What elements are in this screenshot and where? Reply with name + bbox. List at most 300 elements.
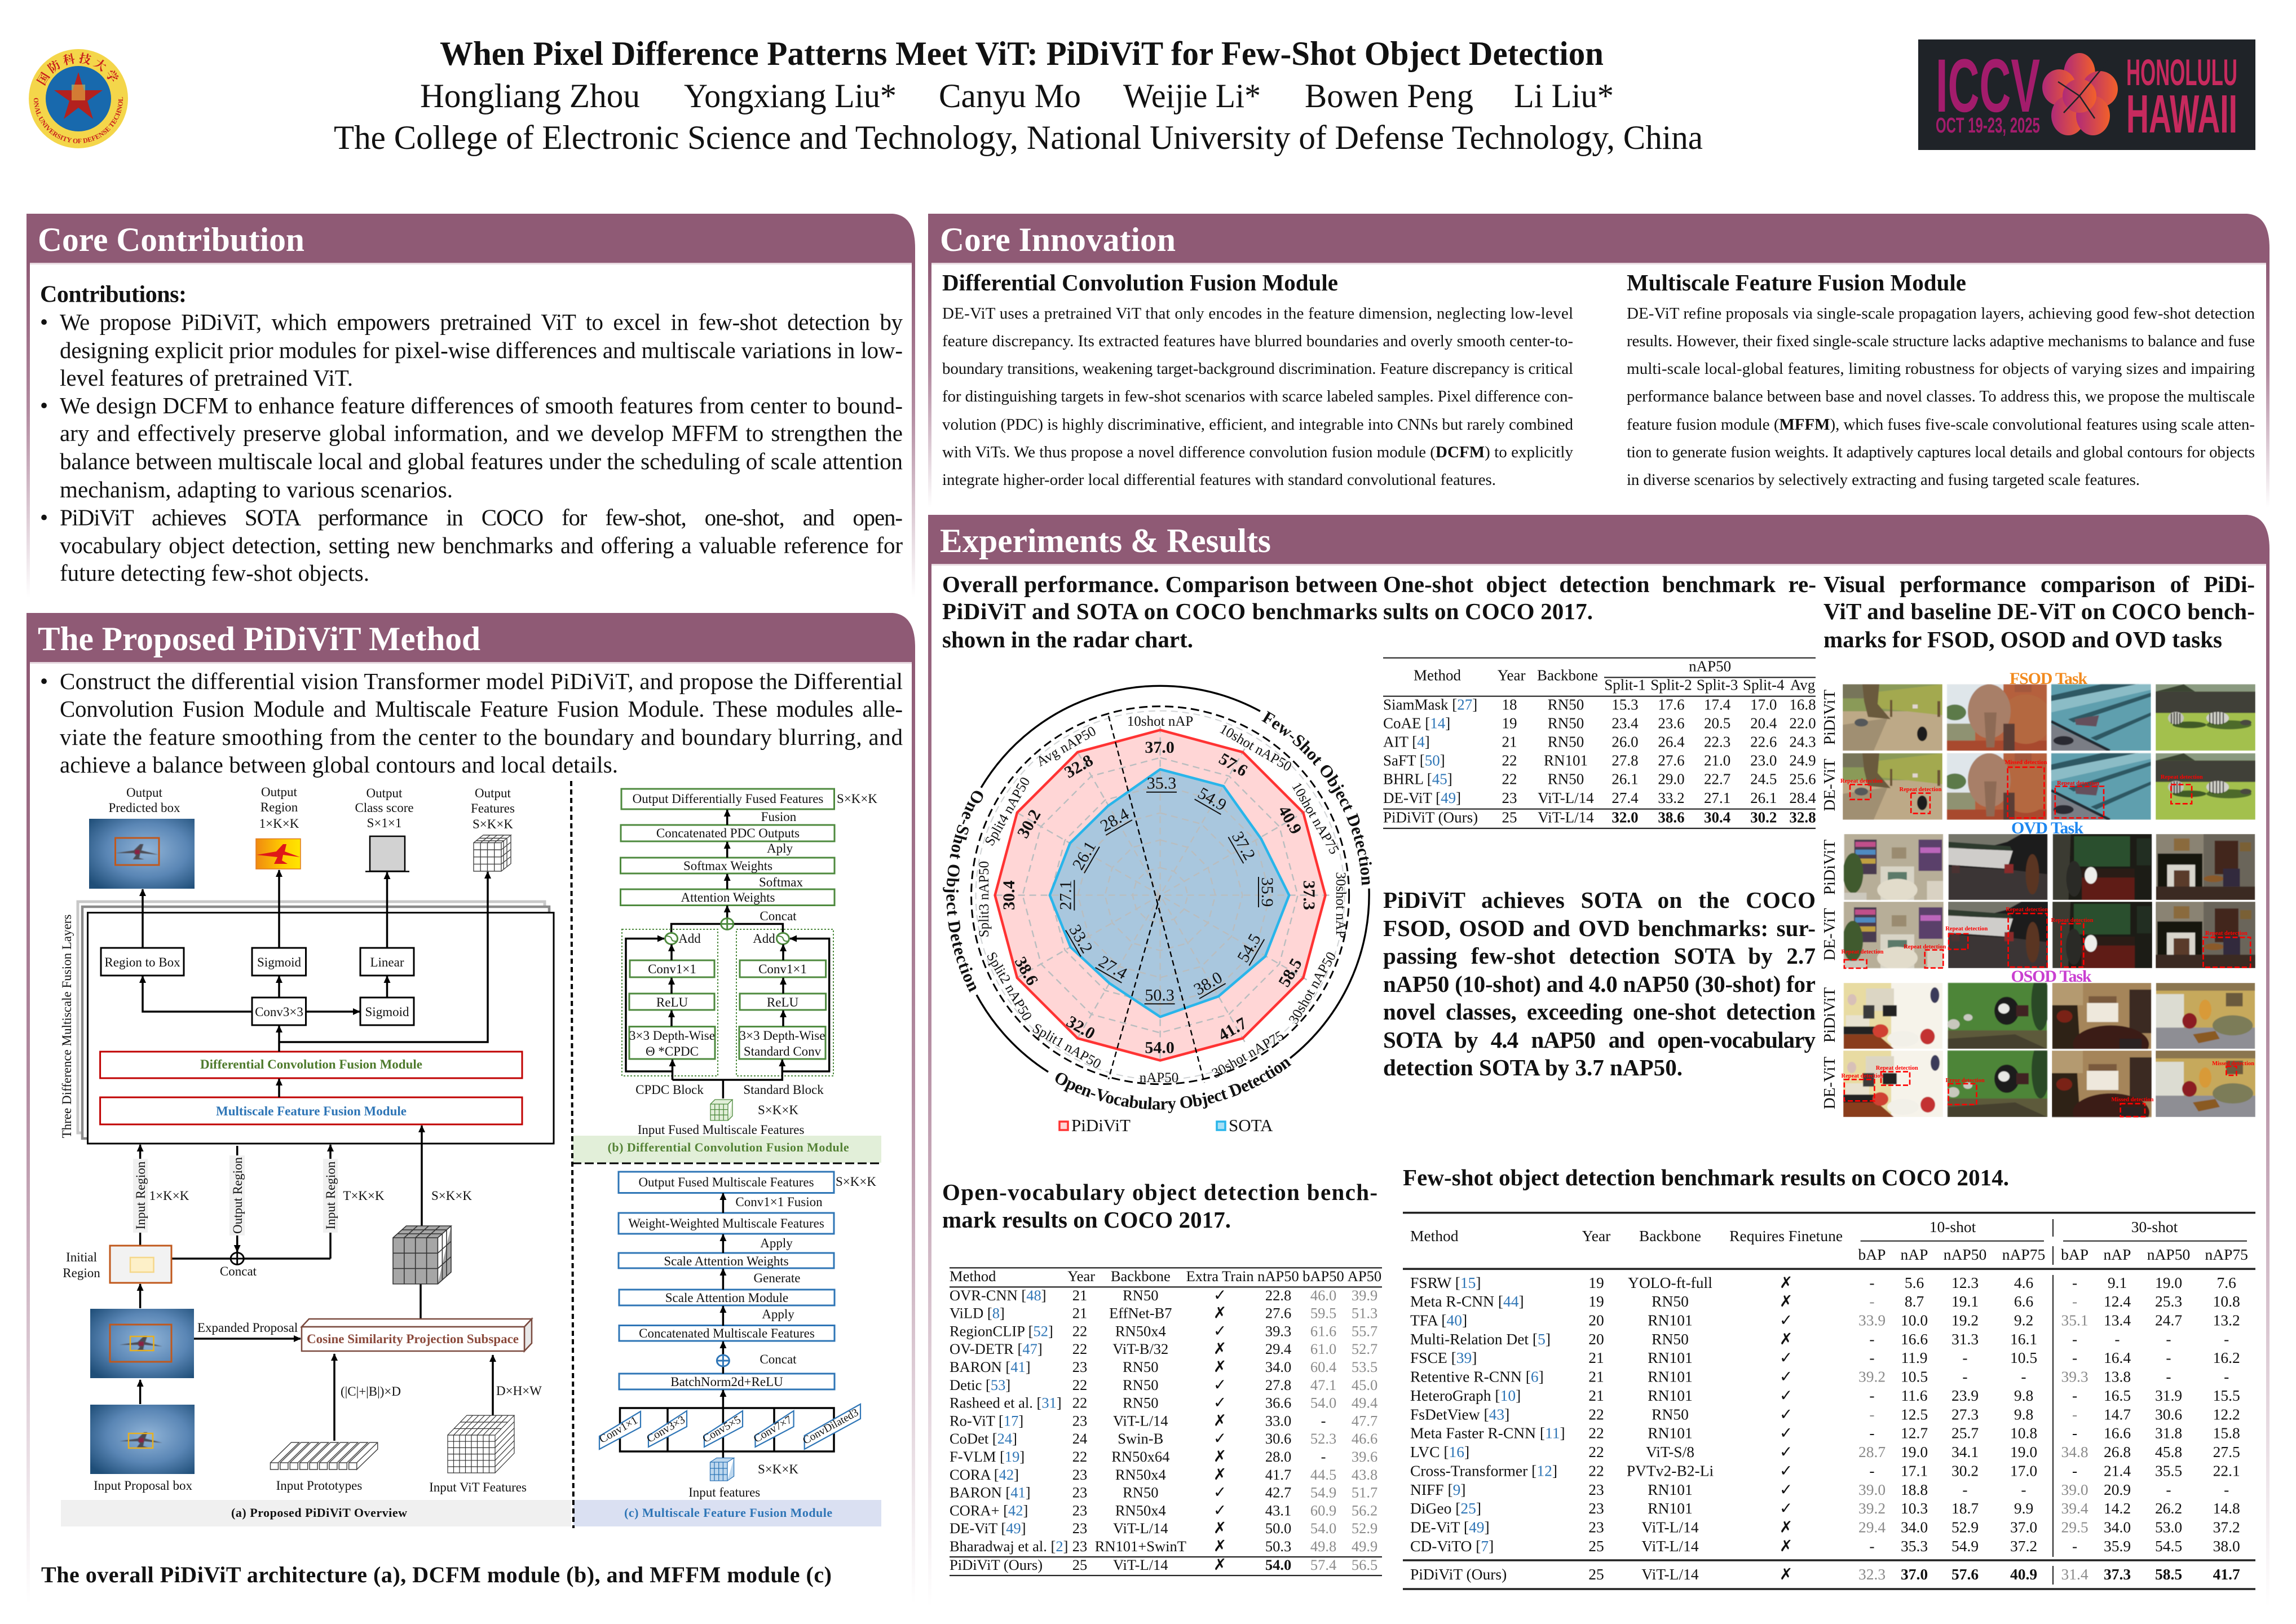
table rows: ✗ — [1213, 1537, 1226, 1555]
table rows: 50.0 — [1265, 1520, 1291, 1537]
table rows: 11.6 — [1901, 1387, 1928, 1404]
table rows: CoDet [24] — [950, 1430, 1017, 1447]
standard block: 3×3 Depth-Wise — [740, 1029, 825, 1043]
dimension labels: Input Prototypes — [276, 1479, 362, 1493]
inner blocks: Linear — [370, 955, 404, 969]
text: one-shot heading: sults on COCO 2017. — [1383, 598, 1593, 624]
table rows: RN101 — [1648, 1499, 1693, 1517]
standard block: Conv1×1 — [758, 962, 807, 976]
table header: nAP50 — [1944, 1246, 1986, 1263]
table rows: 51.7 — [1352, 1484, 1377, 1501]
legend: PiDiViT — [1071, 1115, 1131, 1135]
text block: contributions: designing explicit prior modules for pixel-wise differences and multiscale variations in low- — [60, 337, 903, 363]
table row: ours: ViT-L/14 — [1538, 809, 1594, 826]
table rows: 23 — [1588, 1518, 1604, 1536]
table rows: RN50x4 — [1115, 1502, 1166, 1519]
table rows: 19.0 — [2155, 1274, 2182, 1291]
text block: multiscale feature fusion module — [1627, 270, 2255, 489]
table rows: 24.7 — [2155, 1312, 2182, 1329]
table row: ours: 37.0 — [1901, 1565, 1928, 1583]
table rows: 24.3 — [1789, 733, 1816, 750]
PiDiViT values: 30.4 — [1000, 880, 1018, 910]
table rows: RN50x4 — [1115, 1322, 1166, 1339]
stacked output boxes: Output Differentially Fused Features — [633, 792, 823, 806]
PiDiViT values: 32.8 — [1061, 751, 1096, 782]
panel: the proposed PiDiViT method — [27, 613, 915, 1604]
table rows: - — [1869, 1537, 1875, 1555]
stacked output boxes: Fusion — [761, 810, 797, 824]
table rows: 31.3 — [1951, 1330, 1979, 1348]
table header: bAP50 — [1302, 1268, 1344, 1285]
stacked blocks: S×K×K — [836, 1175, 876, 1189]
dimension labels: Input ViT Features — [429, 1480, 527, 1494]
axis labels — [977, 714, 1348, 1085]
stacked blocks: Generate — [753, 1271, 801, 1285]
table rows: 17.6 — [1658, 696, 1685, 713]
table rows: 42.7 — [1265, 1484, 1291, 1501]
standard block: Standard Conv — [744, 1044, 822, 1058]
table rows: 45.8 — [2155, 1443, 2182, 1460]
output images and labels: 1×K×K — [259, 817, 299, 831]
heading: few-shot results: Few-shot object detection benchmark results on COCO 2014. — [1403, 1164, 2009, 1190]
table header: Year — [1582, 1227, 1610, 1245]
stacked blocks: Output Fused Multiscale Features — [638, 1175, 814, 1189]
table row: ours: 40.9 — [2010, 1565, 2037, 1583]
table rows: - — [1321, 1448, 1326, 1465]
table rows: 49.9 — [1352, 1538, 1377, 1555]
table rows: 19 — [1588, 1292, 1604, 1310]
FSOD images: Repeat detection — [2161, 774, 2203, 780]
table rows: 27.5 — [2213, 1443, 2240, 1460]
text block: multiscale feature fusion module: tion to generate fusion weights. It adaptively captures local details and global contours for objects — [1627, 443, 2255, 461]
input fused multiscale features: Input Fused Multiscale Features — [638, 1123, 805, 1137]
CPDC block: 3×3 Depth-Wise — [629, 1029, 715, 1043]
table rows: 19 — [1588, 1274, 1604, 1291]
SOTA values: 28.4 — [1097, 805, 1132, 836]
PiDiViT values — [1000, 738, 1318, 1057]
table rows: 21.4 — [2104, 1462, 2131, 1479]
table rows: RN50 — [1123, 1484, 1158, 1501]
table rows: 22 — [1072, 1340, 1087, 1357]
table rows: BHRL [45] — [1383, 771, 1452, 788]
text block: contributions: future detecting few-shot objects. — [60, 560, 369, 586]
table rows: - — [2166, 1349, 2171, 1366]
table rows: RN101 — [1648, 1312, 1693, 1329]
standard block — [736, 929, 833, 1097]
table header: nAP — [1901, 1246, 1928, 1263]
text block: method intro: • — [40, 668, 48, 694]
table rows: 24.9 — [1789, 752, 1816, 769]
table rows: 56.2 — [1352, 1502, 1377, 1519]
table rows: ✓ — [1780, 1442, 1792, 1461]
text: overall performance: Overall performance. Comparison between — [942, 571, 1377, 597]
table rows: 16.1 — [2010, 1330, 2037, 1348]
stacked output boxes — [620, 789, 877, 923]
axis labels: nAP50 — [1140, 1070, 1178, 1085]
group titles: One-Shot Object Detection — [943, 791, 983, 992]
row labels — [1821, 690, 1839, 1109]
table rows: 35.5 — [2155, 1462, 2182, 1479]
stacked blocks: Concatenated Multiscale Features — [639, 1326, 815, 1340]
table row: ours: 54.0 — [1265, 1556, 1291, 1573]
table header: Split-1 — [1604, 676, 1646, 693]
table rows: 34.0 — [1265, 1358, 1291, 1375]
SOTA values: 50.3 — [1145, 986, 1175, 1004]
table rows: 52.9 — [1352, 1520, 1377, 1537]
table rows: ✗ — [1213, 1465, 1226, 1484]
table rows: 35.9 — [2104, 1537, 2131, 1555]
table header: nAP50 — [1689, 658, 1731, 675]
table rows: BARON [41] — [950, 1484, 1031, 1501]
table rows: RegionCLIP [52] — [950, 1322, 1053, 1339]
table rows: 19 — [1502, 715, 1517, 732]
table rows: 23.4 — [1611, 715, 1639, 732]
table rows: RN101 — [1648, 1481, 1693, 1498]
table rows: DE-ViT [49] — [1410, 1518, 1490, 1536]
table rows: 39.2 — [1858, 1368, 1886, 1385]
output images and labels: Features — [471, 801, 515, 815]
table rows: 20.5 — [1704, 715, 1730, 732]
table rows: 16.6 — [2104, 1424, 2131, 1442]
table rows: 21 — [1588, 1349, 1604, 1366]
table rows: 10.8 — [2010, 1424, 2037, 1442]
table header: nAP75 — [2002, 1246, 2045, 1263]
table row: ours: ✗ — [1213, 1555, 1226, 1574]
table rows: 29.5 — [2061, 1518, 2089, 1536]
table rows: ✗ — [1780, 1537, 1792, 1555]
text block: contributions: vocabulary object detection, setting new benchmarks and offering a valuable reference for — [60, 532, 903, 558]
table header: nAP75 — [2205, 1246, 2248, 1263]
bands: figure captions: (b) Differential Convolution Fusion Module — [608, 1140, 849, 1154]
text block: multiscale feature fusion module: performance balance between base and novel classes. To address this, we propose the multiscale — [1627, 387, 2255, 405]
input fused multiscale features: S×K×K — [758, 1103, 798, 1117]
logo: ICCV 2025 Honolulu Hawaii: OCT 19-23, 2025 — [1936, 114, 2040, 138]
authors: Yongxiang Liu* — [684, 77, 897, 114]
text block: contributions — [40, 282, 903, 586]
table rows: 17.0 — [2010, 1462, 2037, 1479]
icon: input ViT features — [448, 1415, 514, 1473]
table rows: - — [1869, 1330, 1875, 1348]
FSOD images: Repeat detection — [1900, 787, 1942, 793]
text block: contributions: We design DCFM to enhance feature differences of smooth features from center to bound- — [60, 392, 903, 418]
table rows: ✓ — [1213, 1483, 1226, 1502]
table rows: 22 — [1072, 1448, 1087, 1465]
table row: ours: ✗ — [1780, 1565, 1792, 1583]
CPDC block: Add — [678, 932, 701, 946]
axis labels: Split1 nAP50 — [1030, 1021, 1103, 1072]
conv branches: Conv7×7 — [752, 1414, 794, 1445]
table header — [1403, 1213, 2255, 1269]
table rows: - — [2021, 1368, 2026, 1385]
table rows: RN50 — [1123, 1287, 1158, 1304]
table rows: 28.7 — [1858, 1443, 1886, 1460]
table rows: 30.6 — [2155, 1405, 2182, 1423]
table rows: 31.8 — [2155, 1424, 2182, 1442]
axis labels: 10shot nAP — [1127, 714, 1193, 729]
text: visual performance heading: marks for FSOD, OSOD and OVD tasks — [1823, 626, 2222, 652]
PiDiViT values: 30.2 — [1014, 806, 1045, 841]
table header: Backbone — [1537, 667, 1598, 684]
table rows: - — [2072, 1462, 2077, 1479]
table rows: 22 — [1502, 771, 1517, 788]
table rows: 22.3 — [1704, 733, 1730, 750]
table rows: 25.6 — [1789, 771, 1816, 788]
PiDiViT values: 57.6 — [1216, 749, 1251, 780]
table header: nAP50 — [2147, 1246, 2190, 1263]
table rows: ✓ — [1780, 1348, 1792, 1367]
output images and labels: Output — [126, 785, 163, 800]
table row: ours: 32.3 — [1858, 1565, 1886, 1583]
table rows: 60.9 — [1310, 1502, 1336, 1519]
table rows: 52.9 — [1951, 1518, 1979, 1536]
table rows: 12.3 — [1951, 1274, 1979, 1291]
table row: ours: ViT-L/14 — [1113, 1556, 1168, 1573]
PiDiViT values: 58.5 — [1275, 955, 1306, 990]
table rows: 16.4 — [2104, 1349, 2131, 1366]
table rows: 16.8 — [1789, 696, 1816, 713]
heading: experiments and results: Experiments & Results — [940, 522, 1271, 559]
table rows: RN50 — [1123, 1376, 1158, 1393]
table rows: 22.6 — [1750, 733, 1777, 750]
text: results summary: PiDiViT achieves SOTA on the COCO — [1383, 887, 1816, 913]
text block: differential convolution fusion module — [942, 270, 1573, 489]
PiDiViT values: 32.0 — [1063, 1012, 1098, 1043]
table rows: 61.0 — [1310, 1340, 1336, 1357]
table rows: ✗ — [1213, 1357, 1226, 1376]
table rows: ✓ — [1780, 1480, 1792, 1499]
table rows: 22 — [1502, 752, 1517, 769]
stacked output boxes: Concat — [760, 909, 797, 923]
table rows — [1383, 696, 1816, 806]
SOTA values: 35.9 — [1258, 877, 1277, 907]
FSOD images: Missed detection — [2005, 760, 2047, 766]
table row: ours: 41.7 — [2213, 1565, 2240, 1583]
table header: bAP — [1858, 1246, 1886, 1263]
text block: contributions: PiDiViT achieves SOTA performance in COCO for few-shot, one-shot, and open- — [60, 505, 903, 531]
table rows: - — [2166, 1368, 2171, 1385]
cube: similarity features — [393, 1226, 451, 1284]
table rows: EffNet-B7 — [1109, 1305, 1172, 1322]
table rows — [1410, 1273, 2240, 1557]
table rows: 22 — [1072, 1394, 1087, 1411]
table rows: ✗ — [1780, 1273, 1792, 1292]
table rows: ViT-B/32 — [1112, 1340, 1168, 1357]
table row: ours — [950, 1555, 1382, 1576]
table rows: 22 — [1588, 1443, 1604, 1460]
table rows: 36.6 — [1265, 1394, 1291, 1411]
text: results summary: passing few-shot detection SOTA by 2.7 — [1383, 943, 1816, 969]
inner blocks: Region to Box — [104, 955, 180, 969]
diagram: (a) PiDiViT overview — [60, 785, 554, 1494]
SOTA values: 27.1 — [1056, 880, 1075, 910]
text block: method intro: viate the feature smoothing from the center to the boundary and boundary blurring, and — [60, 724, 903, 750]
diagram: (b) differential convolution fusion module — [620, 789, 877, 1137]
table rows: ✗ — [1213, 1339, 1226, 1358]
table rows: ✓ — [1213, 1375, 1226, 1394]
table rows: 34.8 — [2061, 1443, 2089, 1460]
initial region box — [110, 1246, 171, 1283]
image: input proposal box — [90, 1405, 195, 1474]
table rows: ✗ — [1213, 1519, 1226, 1537]
table rows: 35.3 — [1901, 1537, 1928, 1555]
input fused multiscale features — [638, 1060, 805, 1137]
input features: Input features — [688, 1485, 760, 1499]
table row: ours: ViT-L/14 — [1641, 1565, 1699, 1583]
table rows: ✓ — [1780, 1461, 1792, 1480]
text block: method intro: achieve a balance between global contours and local details. — [60, 752, 618, 778]
table rows: 46.0 — [1310, 1287, 1336, 1304]
table rows: 6.6 — [2014, 1292, 2033, 1310]
authors: Hongliang Zhou — [420, 77, 640, 114]
table rows: 9.2 — [2014, 1312, 2033, 1329]
table rows: 21 — [1588, 1368, 1604, 1385]
table rows: ✓ — [1213, 1393, 1226, 1412]
stacked output boxes: Aply — [767, 841, 793, 855]
table rows: 23.6 — [1658, 715, 1685, 732]
table rows: - — [2072, 1292, 2077, 1310]
table rows: CORA [42] — [950, 1466, 1019, 1483]
stacked blocks: Apply — [760, 1236, 793, 1250]
table rows: 12.2 — [2213, 1405, 2240, 1423]
block: multiscale feature fusion module: Multiscale Feature Fusion Module — [216, 1104, 407, 1118]
table rows: 39.2 — [1858, 1499, 1886, 1517]
table rows: RN50 — [1548, 696, 1584, 713]
table rows: 13.8 — [2104, 1368, 2131, 1385]
table row: ours: 32.8 — [1789, 809, 1816, 826]
SOTA values: 27.4 — [1096, 952, 1131, 983]
dimension labels: (|C|+|B|)×D — [341, 1384, 401, 1398]
dashed dividers — [571, 781, 881, 1528]
table rows: 20.4 — [1750, 715, 1777, 732]
table rows: RN50 — [1548, 715, 1584, 732]
table rows: RN101 — [1648, 1368, 1693, 1385]
table rows: 17.1 — [1901, 1462, 1928, 1479]
group titles — [943, 710, 1372, 1113]
table rows: 27.1 — [1704, 789, 1730, 806]
text block: method intro: Construct the differential vision Transformer model PiDiViT, and propose the Differential — [60, 668, 903, 694]
OSOD images — [1842, 974, 2255, 1132]
table rows: 16.5 — [2104, 1387, 2131, 1404]
table rows: - — [1869, 1349, 1875, 1366]
table rows: ✗ — [1213, 1447, 1226, 1466]
stacked output boxes: Attention Weights — [681, 890, 775, 904]
table rows: RN50 — [1548, 733, 1584, 750]
table rows: 15.5 — [2213, 1387, 2240, 1404]
table rows: 34.0 — [2104, 1518, 2131, 1536]
text block: multiscale feature fusion module: Multiscale Feature Fusion Module — [1627, 270, 1966, 295]
table rows: RN101 — [1544, 752, 1588, 769]
SOTA values: 38.0 — [1191, 968, 1226, 999]
table rows: 27.6 — [1265, 1305, 1291, 1322]
table rows: 19.0 — [1901, 1443, 1928, 1460]
table row: ours: 31.4 — [2061, 1565, 2089, 1583]
table rows: 22 — [1072, 1322, 1087, 1339]
text block: differential convolution fusion module: boundary transitions, weakening target-background discrimination. Feature discrepancy is critical — [942, 360, 1573, 378]
text block: contributions: Contributions: — [40, 282, 187, 308]
heading: open-vocabulary results — [942, 1179, 1377, 1233]
table header: Year — [1498, 667, 1525, 684]
table rows: - — [2072, 1405, 2077, 1423]
table rows: 23.0 — [1750, 752, 1777, 769]
table rows: 39.4 — [2061, 1499, 2089, 1517]
table rows: 22 — [1072, 1376, 1087, 1393]
table rows: 15.3 — [1611, 696, 1639, 713]
table header — [1383, 658, 1816, 696]
table rows: 37.0 — [2010, 1518, 2037, 1536]
table rows: ✗ — [1780, 1518, 1792, 1536]
table rows: ✓ — [1780, 1310, 1792, 1330]
table rows: ✓ — [1213, 1286, 1226, 1304]
table rows: 5.6 — [1905, 1274, 1924, 1291]
authors: Weijie Li* — [1123, 77, 1261, 114]
legend: SOTA — [1229, 1115, 1273, 1135]
text block: multiscale feature fusion module: multi-scale local-global features, limiting robustness for objects of varying sizes and impairing — [1627, 360, 2255, 378]
text: one-shot heading: One-shot object detection benchmark re- — [1383, 571, 1816, 597]
dimension labels: S×K×K — [431, 1189, 472, 1203]
table rows: 43.8 — [1352, 1466, 1377, 1483]
text block: multiscale feature fusion module: DE-ViT refine proposals via single-scale propagation layers, achieving good few-shot detection — [1627, 304, 2255, 323]
table rows: 39.3 — [1265, 1322, 1291, 1339]
table row: ours: 37.3 — [2104, 1565, 2131, 1583]
table header: AP50 — [1348, 1268, 1381, 1285]
table rows: 53.0 — [2155, 1518, 2182, 1536]
axis labels: 10shot nAP75 — [1288, 780, 1342, 857]
dimension labels: Region — [63, 1266, 100, 1280]
table: one-shot detection — [1383, 658, 1816, 828]
table rows: 52.7 — [1352, 1340, 1377, 1357]
image: expanded proposal — [90, 1309, 194, 1378]
table row: ours: PiDiViT (Ours) — [1383, 809, 1478, 826]
text block: contributions: • — [40, 309, 48, 335]
table rows: 20 — [1588, 1312, 1604, 1329]
table rows: 22.0 — [1789, 715, 1816, 732]
table rows: ✓ — [1213, 1321, 1226, 1340]
CPDC block: CPDC Block — [635, 1083, 704, 1097]
dimension labels — [63, 1189, 542, 1494]
conv branches: Conv1×1 — [597, 1414, 640, 1446]
table rows: - — [2224, 1481, 2229, 1498]
table rows: DE-ViT [49] — [1383, 789, 1461, 806]
table rows: 26.4 — [1658, 733, 1685, 750]
table rows: ✓ — [1213, 1429, 1226, 1448]
table rows: 20.9 — [2104, 1481, 2131, 1498]
conv branches: Conv3×3 — [644, 1414, 687, 1445]
axis labels: 30shot nAP50 — [1286, 950, 1339, 1027]
text block: multiscale feature fusion module: feature fusion module (MFFM), which fuses five-scale convolutional features using scale atten- — [1627, 416, 2255, 434]
table rows: 9.8 — [2014, 1387, 2033, 1404]
table rows: 23 — [1072, 1520, 1087, 1537]
table rows: 17.0 — [1750, 696, 1777, 713]
table rows: - — [2224, 1368, 2229, 1385]
table row: ours: 38.6 — [1658, 809, 1685, 826]
table header: nAP — [2104, 1246, 2131, 1263]
inner blocks — [101, 948, 414, 1025]
authors: Li Liu* — [1514, 77, 1614, 114]
text block: contributions: balance between multiscale local and global features under the scheduling of scale attention — [60, 448, 903, 474]
logo: university seal — [29, 49, 128, 148]
standard block: Standard Block — [743, 1083, 824, 1097]
block: cosine similarity projection subspace: Cosine Similarity Projection Subspace — [307, 1332, 519, 1346]
image grid: visual comparison — [1821, 669, 2255, 1132]
table header: 10-shot — [1929, 1218, 1976, 1235]
stacked blocks: Weight-Weighted Multiscale Features — [628, 1216, 824, 1230]
table rows: 20 — [1588, 1330, 1604, 1348]
diagram: (a) PiDiViT overview: Three Difference Multiscale Fusion Layers — [60, 915, 74, 1138]
table rows: Cross-Transformer [12] — [1410, 1462, 1557, 1479]
heading: core contribution: Core Contribution — [38, 221, 304, 258]
table rows: - — [2072, 1349, 2077, 1366]
table rows: 54.0 — [1310, 1520, 1336, 1537]
